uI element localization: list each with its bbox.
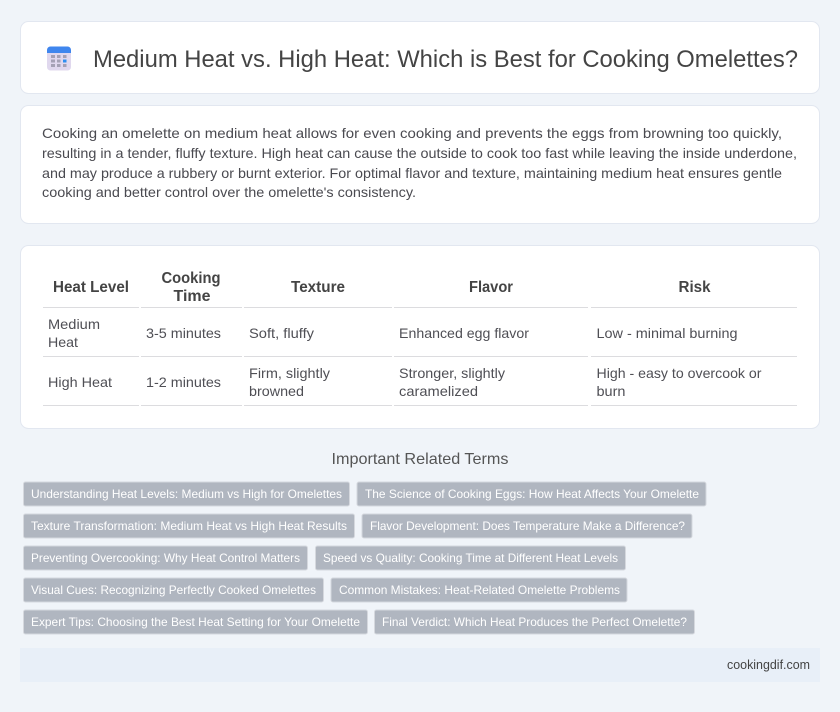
tag: Understanding Heat Levels: Medium vs High for Omelettes [31,487,342,501]
table header row [53,270,711,305]
table row: medium heat: Medium [48,316,100,332]
tag: Visual Cues: Recognizing Perfectly Cooked Omelettes [31,583,316,597]
tag: Final Verdict: Which Heat Produces the Perfect Omelette? [382,615,687,629]
related term tags [24,482,706,634]
tag: Speed vs Quality: Cooking Time at Different Heat Levels [323,551,618,565]
tag [24,610,368,634]
heading: related terms: Important Related Terms [332,451,508,468]
tag: Texture Transformation: Medium Heat vs High Heat Results [31,519,347,533]
tag [331,578,627,602]
table header row: Flavor [469,279,513,296]
tag [24,514,354,538]
table row: medium heat: Soft, fluffy [249,325,314,341]
icon: calendar [47,46,71,70]
tag: Preventing Overcooking: Why Heat Control Matters [31,551,300,565]
table header row: Time [174,288,211,305]
panel: header [20,22,820,94]
tag [357,482,706,506]
table header row: Cooking [162,270,220,287]
title: Medium Heat vs. High Heat: Which is Best for Cooking Omelettes? [93,46,798,73]
table header row: Texture [291,279,345,296]
text block: introduction: cooking and better control over the omelette's consistency. [42,184,416,200]
table row: high heat: Stronger, slightly [399,365,505,381]
table row: medium heat: Low - minimal burning [596,325,738,341]
table row: high heat: Firm, slightly [249,365,330,381]
tag: Expert Tips: Choosing the Best Heat Setting for Your Omelette [31,615,360,629]
table row: medium heat: Heat [48,334,78,350]
tag [316,546,626,570]
tag: Common Mistakes: Heat-Related Omelette Problems [339,583,620,597]
footer [20,648,820,682]
table header row: Heat Level [53,279,129,296]
text block: introduction: Cooking an omelette on medium heat allows for even cooking and prevents the eggs from browning too quickly, [42,125,782,141]
tag: The Science of Cooking Eggs: How Heat Affects Your Omelette [365,487,699,501]
table header row: Risk [678,279,711,296]
footer source text: cookingdif.com [727,658,810,672]
tag [24,546,308,570]
tag [374,610,694,634]
tag: Flavor Development: Does Temperature Make a Difference? [370,519,685,533]
table row: high heat [48,365,762,399]
table row: high heat: 1-2 minutes [146,374,221,390]
table row: medium heat: 3-5 minutes [146,325,221,341]
table row: medium heat: Enhanced egg flavor [399,325,529,341]
table row: medium heat [48,316,738,350]
table row: high heat: caramelized [399,383,478,399]
panel: introduction [20,106,820,224]
text block: introduction: and may produce a rubbery or burnt exterior. For optimal flavor and texture, maintaining medium heat ensures gentle [42,165,782,181]
text block: introduction [42,125,797,200]
tag [24,578,324,602]
table row: high heat: High - easy to overcook or [596,365,762,381]
table row: high heat: burn [596,383,626,399]
tag [24,482,350,506]
text block: introduction: resulting in a tender, fluffy texture. High heat can cause the outside to cook too fast while leaving the inside underdone, [42,145,797,161]
panel: comparison table [20,246,820,428]
tag [362,514,692,538]
table row: high heat: High Heat [48,374,112,390]
table row: high heat: browned [249,383,304,399]
